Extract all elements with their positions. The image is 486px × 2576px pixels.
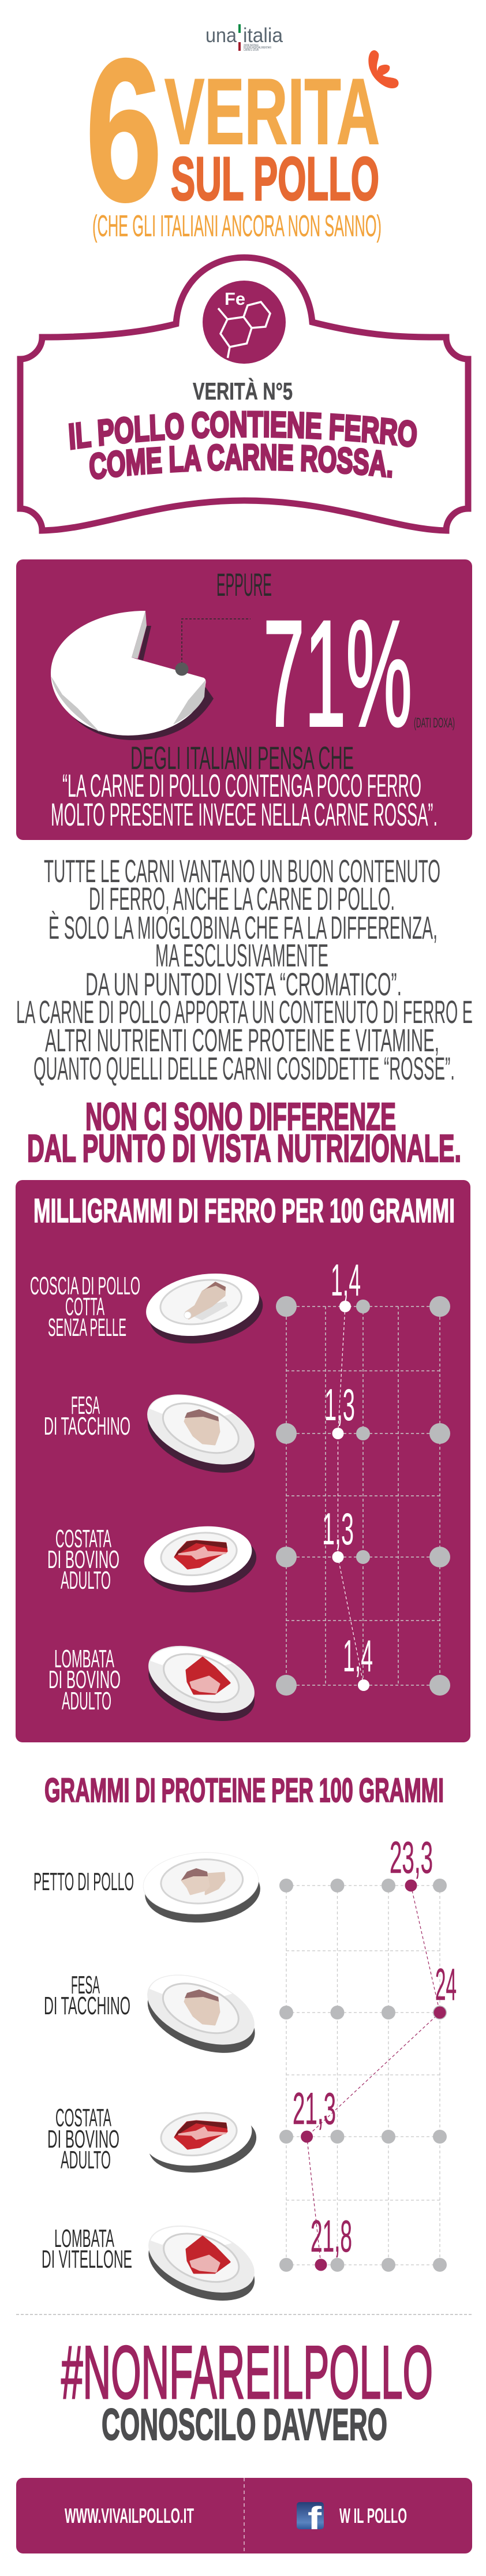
quote (51, 767, 438, 832)
link: website: WWW.VIVAILPOLLO.IT (65, 2504, 194, 2528)
panel: 71% statistic (16, 559, 472, 840)
panel: milligrammi di ferro (16, 1180, 470, 1742)
row 4: lombata di bovino adulto: DI BOVINO (48, 1666, 121, 1694)
row 3: costata di bovino adulto (47, 2100, 260, 2179)
row 4: lombata di vitellone: LOMBATA (54, 2224, 114, 2253)
chart: protein grid (279, 1879, 447, 2272)
row 3: costata di bovino adulto: DI BOVINO (47, 1545, 119, 1574)
row 4: lombata di bovino adulto (48, 1633, 266, 1734)
icon: iron molecule: Fe (225, 289, 245, 309)
row 3: costata di bovino adulto (47, 1520, 260, 1599)
row 3: costata di bovino adulto: COSTATA (55, 1525, 111, 1553)
logo: unaitalia (205, 24, 283, 52)
values: protein (293, 1832, 457, 2261)
chart: iron grid (276, 1296, 450, 1696)
headline: il pollo contiene ferro (68, 410, 417, 480)
row 3: costata di bovino adulto: ADULTO (61, 2146, 111, 2174)
row 1: petto di pollo (33, 1849, 262, 1927)
row 4: lombata di bovino adulto: ADULTO (62, 1687, 111, 1715)
row 3: costata di bovino adulto: COSTATA (55, 2104, 111, 2132)
row 2: fesa di tacchino (44, 1961, 268, 2067)
values: iron (322, 1255, 373, 1681)
row 1: coscia di pollo: COSCIA DI POLLO (30, 1272, 140, 1300)
values: protein: 21,8 (311, 2211, 352, 2261)
text: 24 (435, 1959, 457, 2010)
row 4: lombata di vitellone: DI VITELLONE (42, 2245, 132, 2273)
row 3: costata di bovino adulto: ADULTO (61, 1566, 111, 1595)
icon: facebook: f (308, 2500, 321, 2536)
row 2: fesa di tacchino: FESA (71, 1391, 100, 1420)
row 1: coscia di pollo (30, 1265, 268, 1352)
row 2: fesa di tacchino: DI TACCHINO (44, 1992, 130, 2020)
row 3: costata di bovino adulto: DI BOVINO (47, 2125, 119, 2153)
logo: unaitalia: una (205, 24, 237, 47)
panel: 71% statistic: EPPURE (216, 566, 272, 603)
badge frame (20, 257, 468, 531)
panel: milligrammi di ferro: 1,4 (343, 1630, 373, 1681)
chart: pie 71% (51, 611, 251, 740)
title: 6 verità sul pollo (85, 16, 399, 244)
row 4: lombata di vitellone (42, 2212, 266, 2314)
panel: grammi di proteine (33, 1772, 457, 2314)
panel: footer links (16, 2478, 472, 2553)
headline: il pollo contiene ferro: COME LA CARNE ROSSA. (89, 443, 392, 480)
row 1: coscia di pollo: COTTA (65, 1293, 104, 1321)
values: iron: 1,4 (331, 1255, 361, 1305)
label: verità n°5: VERITÀ N°5 (193, 378, 293, 405)
values: protein: 21,3 (293, 2083, 336, 2134)
row 2: fesa di tacchino: DI TACCHINO (44, 1412, 130, 1440)
values: protein: 23,3 (390, 1832, 433, 1883)
row 2: fesa di tacchino (44, 1380, 268, 1487)
values: iron: 1,3 (324, 1379, 355, 1430)
panel: verità n°5 badge (17, 254, 471, 534)
row 1: coscia di pollo: SENZA PELLE (48, 1313, 126, 1342)
logo: unaitalia: FILIERE AGROALIMENTARI (244, 46, 271, 50)
headline: il pollo contiene ferro: IL POLLO CONTIENE FERRO (68, 410, 417, 450)
logo: unaitalia: CARNI E UOVA (244, 48, 259, 52)
row 4: lombata di bovino adulto: LOMBATA (54, 1645, 114, 1673)
icon: iron molecule (203, 281, 286, 364)
logo: unaitalia: UNIONE NAZIONALE (244, 44, 259, 47)
heading: non ci sono differenze (27, 1095, 461, 1170)
values: iron: 1,3 (322, 1503, 354, 1554)
row 1: petto di pollo: PETTO DI POLLO (33, 1868, 134, 1896)
logo: unaitalia: italia (243, 24, 283, 47)
link: w il pollo: W IL POLLO (339, 2504, 407, 2528)
row 2: fesa di tacchino: FESA (71, 1971, 100, 1999)
icon: facebook (297, 2500, 324, 2536)
title: 6 verità sul pollo: 6 (85, 16, 162, 244)
text block: body copy (16, 853, 473, 1087)
